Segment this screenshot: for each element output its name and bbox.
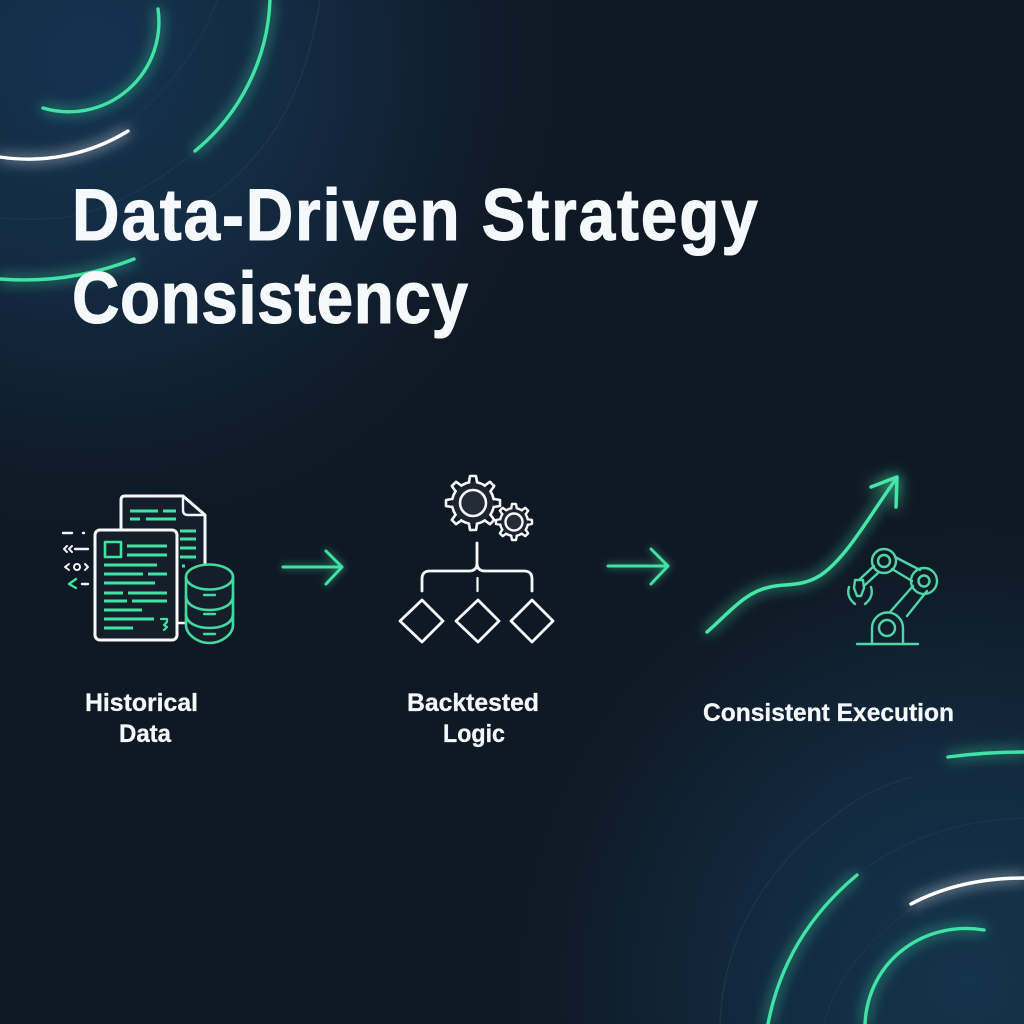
- title: [72, 174, 758, 339]
- front document: [95, 530, 177, 640]
- label: historical data: Data: [119, 720, 172, 748]
- icon: gears and decision tree: [400, 476, 553, 642]
- icon: historical data documents and database: [63, 496, 233, 643]
- label: consistent execution: Consistent Execution: [703, 699, 954, 727]
- icon: rising trend arrow: [707, 477, 897, 632]
- title: Data-Driven Strategy: [72, 174, 758, 256]
- arrow: logic to execution: [608, 549, 668, 584]
- icon: robot arm: [848, 549, 937, 644]
- decorative arcs: bottom right: [720, 752, 1024, 1024]
- label: backtested logic: [407, 689, 539, 748]
- label: backtested logic: Backtested: [407, 689, 539, 717]
- label: backtested logic: Logic: [443, 720, 505, 748]
- icon: large gear: [446, 476, 500, 530]
- icon: small gear: [496, 504, 532, 540]
- label: historical data: Historical: [85, 689, 198, 717]
- arrow: data to logic: [283, 551, 342, 584]
- decorative arcs: top left: [0, 0, 320, 280]
- label: historical data: [85, 689, 198, 748]
- tree connectors: [422, 543, 532, 591]
- decision diamonds: [400, 600, 553, 642]
- database: [186, 564, 233, 643]
- title: Consistency: [72, 257, 468, 339]
- back document: [121, 496, 205, 623]
- icon: code symbols: [63, 533, 88, 588]
